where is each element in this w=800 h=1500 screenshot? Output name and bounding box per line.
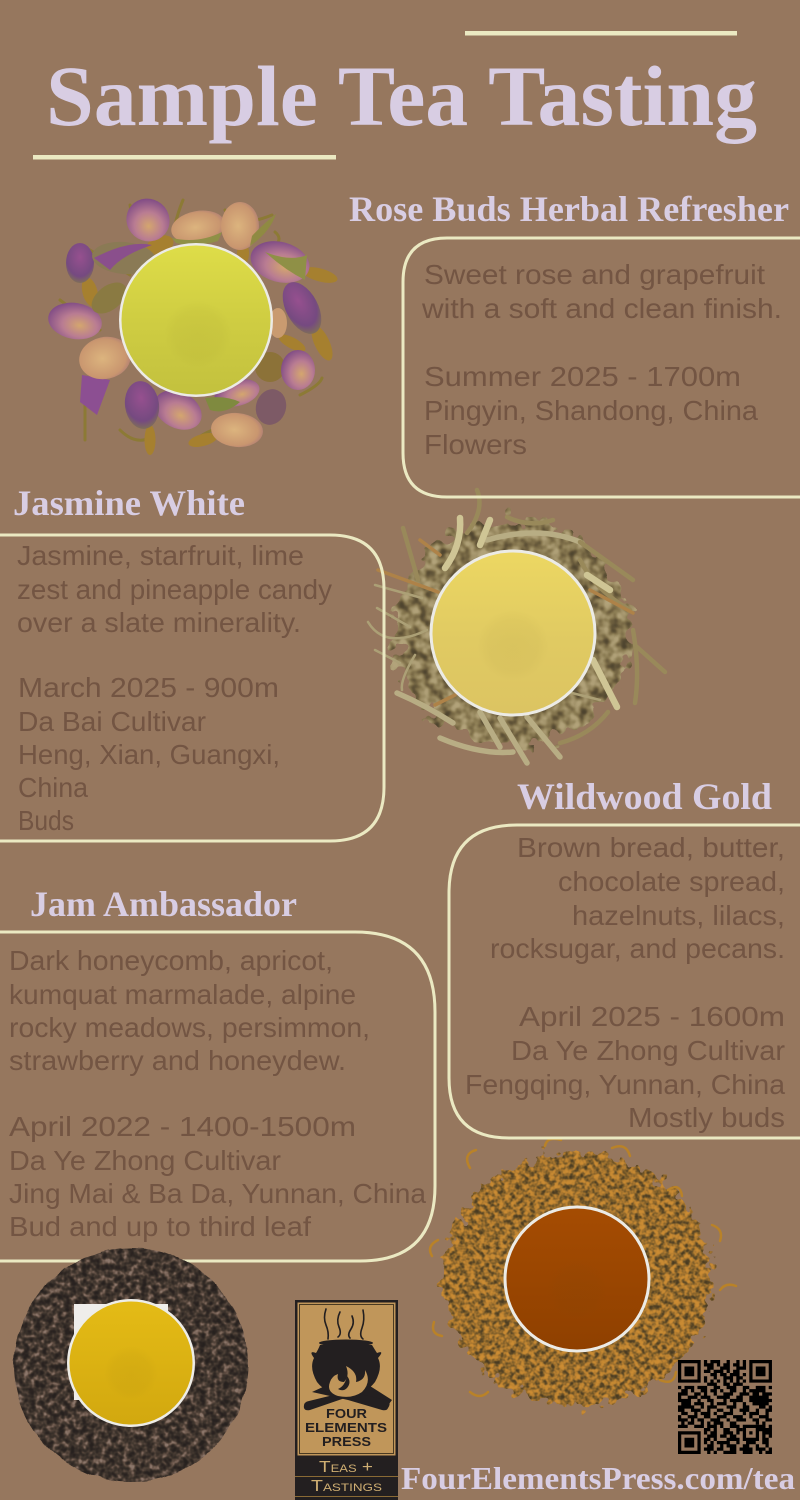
tasting notes text: Pingyin, Shandong, China [424, 395, 758, 426]
logo wordmark: ELEMENTS [305, 1420, 387, 1435]
tasting notes text: Jing Mai & Ba Da, Yunnan, China [9, 1178, 426, 1209]
tasting notes text: rocksugar, and pecans. [490, 933, 785, 964]
heading: Jam Ambassador: Jam Ambassador [30, 884, 297, 924]
tasting notes text [17, 540, 332, 836]
website URL: FourElementsPress.com/tea [401, 1460, 795, 1496]
panel: Jasmine White [0, 483, 384, 841]
tasting notes text: April 2022 - 1400-1500m [9, 1111, 356, 1142]
tasting notes text: April 2025 - 1600m [519, 1001, 785, 1032]
panel: Jam Ambassador [0, 884, 435, 1261]
tea image: rose buds with cup [45, 190, 339, 455]
panel outline [0, 932, 435, 1261]
panel outline [0, 535, 384, 841]
tasting notes text [9, 945, 426, 1242]
cup: golden liquor [504, 1206, 650, 1352]
tasting notes text: with a soft and clean finish. [421, 293, 782, 324]
panel outline [449, 825, 800, 1138]
tasting notes text [421, 259, 782, 460]
logo tagline [311, 1459, 382, 1495]
tasting notes text: rocky meadows, persimmon, [9, 1012, 370, 1043]
logo wordmark: PRESS [322, 1434, 371, 1449]
logo wordmark: FOUR [326, 1406, 368, 1421]
cup: pressed cake liquor [67, 1299, 195, 1427]
tasting notes text: Summer 2025 - 1700m [424, 361, 741, 392]
tasting notes text: March 2025 - 900m [18, 672, 279, 703]
logo wordmark [305, 1406, 387, 1449]
tasting notes text: Flowers [424, 429, 527, 460]
logo: Four Elements Press [295, 1300, 398, 1500]
tasting notes text: hazelnuts, lilacs, [572, 900, 785, 931]
panel: Rose Buds Herbal Refresher [349, 189, 800, 497]
title top rule [465, 31, 737, 36]
tasting notes text: chocolate spread, [558, 866, 785, 897]
cup: rose buds liquor [119, 243, 273, 397]
tasting notes text: zest and pineapple candy [17, 574, 332, 605]
tasting notes text: Bud and up to third leaf [9, 1211, 311, 1242]
tasting notes text [465, 832, 785, 1133]
tasting notes text: Heng, Xian, Guangxi, [18, 739, 280, 770]
tasting notes text: Brown bread, butter, [517, 832, 785, 863]
tasting notes text: Da Bai Cultivar [18, 706, 206, 737]
tea image: white buds with cup [368, 490, 665, 763]
tea image: golden buds with cup [430, 1139, 736, 1405]
panel: Wildwood Gold [449, 777, 800, 1138]
tasting notes text: Dark honeycomb, apricot, [9, 945, 333, 976]
tasting notes text: Mostly buds [628, 1102, 785, 1133]
paper label [74, 1304, 168, 1400]
logo tagline: Tastings [311, 1478, 382, 1495]
title block [33, 31, 757, 160]
heading: Wildwood Gold: Wildwood Gold [517, 777, 772, 818]
tasting notes text: China [18, 772, 88, 803]
heading: Rose Buds Herbal Refresher: Rose Buds Herbal Refresher [349, 189, 789, 229]
tasting notes text: Da Ye Zhong Cultivar [9, 1145, 281, 1176]
title: Sample Tea Tasting [46, 48, 757, 144]
tasting notes text: Jasmine, starfruit, lime [17, 540, 304, 571]
icon: steam [324, 1309, 364, 1339]
title bottom rule [33, 155, 336, 160]
tasting notes text: over a slate minerality. [17, 607, 301, 638]
tasting notes text: Sweet rose and grapefruit [424, 259, 765, 290]
QR code [678, 1362, 772, 1452]
tasting notes text: kumquat marmalade, alpine [9, 979, 356, 1010]
heading: Jasmine White: Jasmine White [13, 483, 245, 523]
icon: cauldron over fire [304, 1340, 392, 1410]
tasting notes text: strawberry and honeydew. [9, 1045, 346, 1076]
tea image: pressed cake with cup [14, 1248, 248, 1482]
panel outline [403, 238, 800, 497]
logo tagline: Teas + [319, 1459, 373, 1476]
tasting notes text: Da Ye Zhong Cultivar [511, 1035, 785, 1066]
tasting notes text: Buds [18, 805, 74, 836]
cup: white tea liquor [430, 550, 596, 716]
tasting notes text: Fengqing, Yunnan, China [465, 1069, 785, 1100]
